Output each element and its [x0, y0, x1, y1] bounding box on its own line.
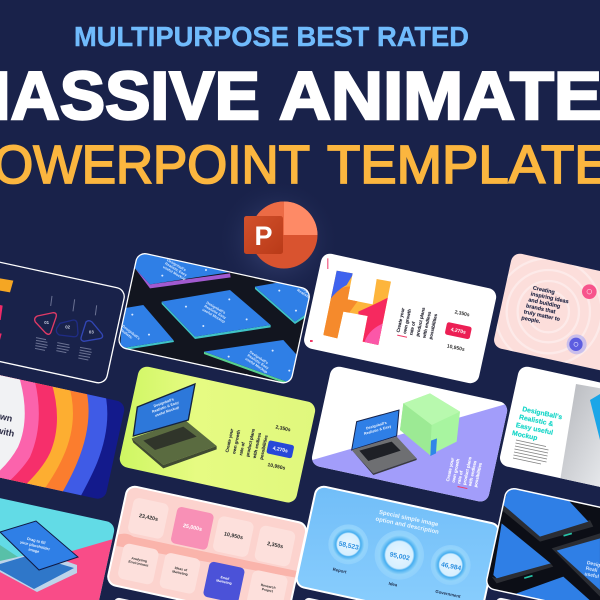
icon: PowerPoint logo: P	[254, 221, 273, 251]
upper tablet: image	[28, 547, 40, 554]
circle 95,002	[375, 530, 424, 580]
panel: letter H slide	[304, 254, 496, 384]
quote text: inspiring ideas	[530, 291, 569, 305]
tile right: Realistic	[296, 288, 311, 300]
laptop	[132, 384, 217, 468]
tile top: useful Mockup	[162, 265, 187, 282]
tile top: Realistic Easy	[164, 262, 188, 278]
slide title: option and description	[375, 517, 440, 536]
body lines	[513, 440, 548, 464]
laptop	[352, 410, 417, 475]
lower tablet	[0, 552, 77, 592]
body text: with endless	[467, 460, 478, 488]
tile bottom: Realistic Easy	[247, 353, 270, 371]
stat 10,950s: 10,950s	[267, 462, 286, 472]
phone 4	[517, 577, 593, 600]
tile right: Designball's	[298, 285, 319, 300]
tile 25,000s	[170, 506, 214, 550]
icon: PowerPoint logo	[216, 178, 340, 302]
heading: powerpoint template	[0, 135, 600, 195]
panel: white mockup slide	[490, 350, 600, 520]
circle 46,984	[431, 545, 471, 585]
tile top	[135, 254, 231, 288]
tile email	[203, 561, 245, 600]
heading text: Easy useful	[515, 422, 554, 437]
phone 1	[502, 488, 593, 542]
panel: pink nodes slide	[95, 480, 320, 600]
tile top: Designball's	[166, 258, 187, 272]
phone 2	[492, 523, 553, 583]
blue blob icon	[567, 334, 587, 354]
tile centre: Realistic Easy	[203, 304, 228, 320]
panel: blue tiles slide	[118, 253, 310, 384]
tile email: Email	[220, 575, 230, 581]
tile analysing: Analysing	[131, 556, 147, 563]
body text: possibilities	[259, 434, 269, 460]
purple diagonal	[312, 404, 508, 502]
tile ideas: Marketing	[172, 569, 188, 577]
teal phone	[590, 388, 600, 445]
upper tablet: Drag to fill	[27, 537, 46, 545]
body text: Create your	[395, 307, 406, 333]
tile bottom: Designball's	[249, 350, 269, 365]
heading text: Realistic &	[518, 414, 554, 428]
body text: possibilities	[473, 462, 483, 488]
body text	[0, 414, 14, 437]
tile left	[119, 305, 174, 351]
red accents	[310, 258, 407, 342]
body text: own growth	[402, 308, 412, 334]
grey image block	[560, 384, 600, 490]
tile left: Realistic	[119, 327, 133, 340]
circle 95,002: 95,002	[389, 551, 411, 562]
tablet shadow	[0, 545, 30, 565]
tile 10,950s: 10,950s	[223, 531, 243, 541]
triangle 03: 03	[89, 329, 94, 334]
tile centre	[162, 290, 271, 339]
panel: rainbow slide	[0, 375, 124, 499]
tile analysing	[117, 543, 160, 585]
accent underline	[457, 486, 467, 489]
laptop: Designball's	[366, 421, 387, 431]
phone 3: Reali	[585, 566, 599, 574]
tile centre: useful Mockup	[201, 308, 226, 324]
body text	[396, 308, 438, 340]
heading text	[511, 405, 563, 446]
body text: rate of	[408, 321, 416, 336]
stat pill 4,270s: 4,270s	[450, 327, 466, 336]
quote text: people.	[521, 315, 541, 325]
label idea: Idea	[388, 581, 398, 588]
body text: own growth	[451, 458, 461, 483]
phone	[430, 438, 437, 456]
phone 3: useful	[584, 571, 600, 580]
circle 58,523: 58,523	[338, 541, 360, 552]
stat 10,950s: 10,950s	[446, 343, 465, 353]
tile bottom: useful Mockup	[244, 357, 269, 375]
triangle 02: 02	[65, 325, 71, 330]
green cube	[400, 393, 460, 455]
phone 3	[552, 533, 600, 597]
tile ideas: Ideas of	[174, 566, 188, 573]
heading text: Mockup	[511, 430, 538, 442]
heading: massive animated	[0, 58, 600, 134]
panel: blue circles slide	[290, 480, 520, 600]
tile 25,000s: 25,000s	[182, 523, 202, 533]
panel: lime laptop slide	[120, 366, 316, 502]
light blob	[0, 375, 25, 470]
quote text: brands that	[525, 303, 556, 315]
panel: dark triangles slide	[0, 262, 125, 384]
laptop: Realistic & Easy	[151, 400, 180, 414]
pink blob icon	[582, 284, 597, 299]
circle 46,984: 46,984	[440, 561, 462, 572]
laptop: Designball's	[153, 397, 175, 408]
body text: with endless	[252, 432, 262, 460]
body text: product plans	[245, 428, 256, 457]
body text	[226, 428, 268, 460]
heading: multipurpose best rated: MULTIPURPOSE BEST RATED	[74, 21, 469, 52]
tile ideas	[159, 552, 201, 595]
body text: own growth	[231, 429, 241, 454]
body text: Create your	[224, 428, 234, 453]
upper tablet: your placeholder	[20, 540, 51, 552]
tile right	[255, 282, 309, 324]
label report: Report	[332, 567, 348, 575]
tile research: Project	[261, 587, 274, 594]
stat pill 4,270s	[266, 440, 294, 459]
letter H	[323, 270, 391, 345]
tile research: Research	[260, 583, 276, 590]
circle 58,523	[328, 524, 368, 564]
tile 2,350s: 2,350s	[266, 541, 284, 550]
panel: phones slide	[480, 480, 600, 600]
wave band	[117, 534, 300, 578]
rainbow bands	[0, 375, 108, 496]
laptop: useful Mockup	[154, 405, 180, 418]
left colour shapes	[0, 278, 13, 340]
body text	[445, 452, 484, 489]
tile bottom	[204, 340, 296, 382]
label government: Government	[435, 589, 461, 599]
panel: pink rings slide	[494, 254, 600, 370]
caption lines	[35, 296, 97, 360]
tile 10,950s	[212, 515, 255, 558]
panel: teal and pink tablets slide	[0, 480, 130, 600]
triangle 01: 01	[44, 320, 50, 325]
panel: purple laptop and cube slide	[312, 366, 508, 502]
tile email: Marketing	[216, 578, 232, 586]
tile 23,420s	[127, 497, 170, 540]
laptop: Realistic & Easy	[364, 424, 393, 436]
tile analysing: Environment	[128, 560, 150, 568]
upper tablet	[0, 521, 78, 570]
slide title: Special simple image	[378, 510, 439, 528]
quote text: truly matter to	[523, 309, 561, 323]
next row slide edges	[112, 597, 546, 600]
quote text	[521, 286, 568, 324]
tile 2,350s	[254, 525, 296, 567]
quote text: Creating	[532, 285, 555, 296]
body text: product plans	[415, 306, 426, 337]
body text: product plans	[462, 456, 473, 485]
body text: rate of	[456, 470, 464, 484]
body text: with endless	[421, 311, 432, 339]
tile 23,420s: 23,420s	[138, 513, 158, 523]
concentric rings	[495, 258, 600, 365]
body text: rate of	[238, 441, 246, 456]
stat 2,350s: 2,350s	[454, 309, 470, 318]
stat pill 4,270s	[445, 322, 472, 339]
heading text: DesignBall's	[522, 406, 563, 421]
tile research	[246, 569, 289, 600]
quote text: and building	[528, 297, 561, 310]
pink area	[0, 537, 120, 600]
stat 2,350s: 2,350s	[275, 424, 291, 434]
stat pill 4,270s: 4,270s	[272, 445, 288, 455]
tile left: Designball's	[121, 324, 141, 341]
body text: Create your	[445, 457, 455, 482]
tile centre: Designball's	[205, 301, 226, 315]
body text: possibilities	[428, 313, 438, 340]
